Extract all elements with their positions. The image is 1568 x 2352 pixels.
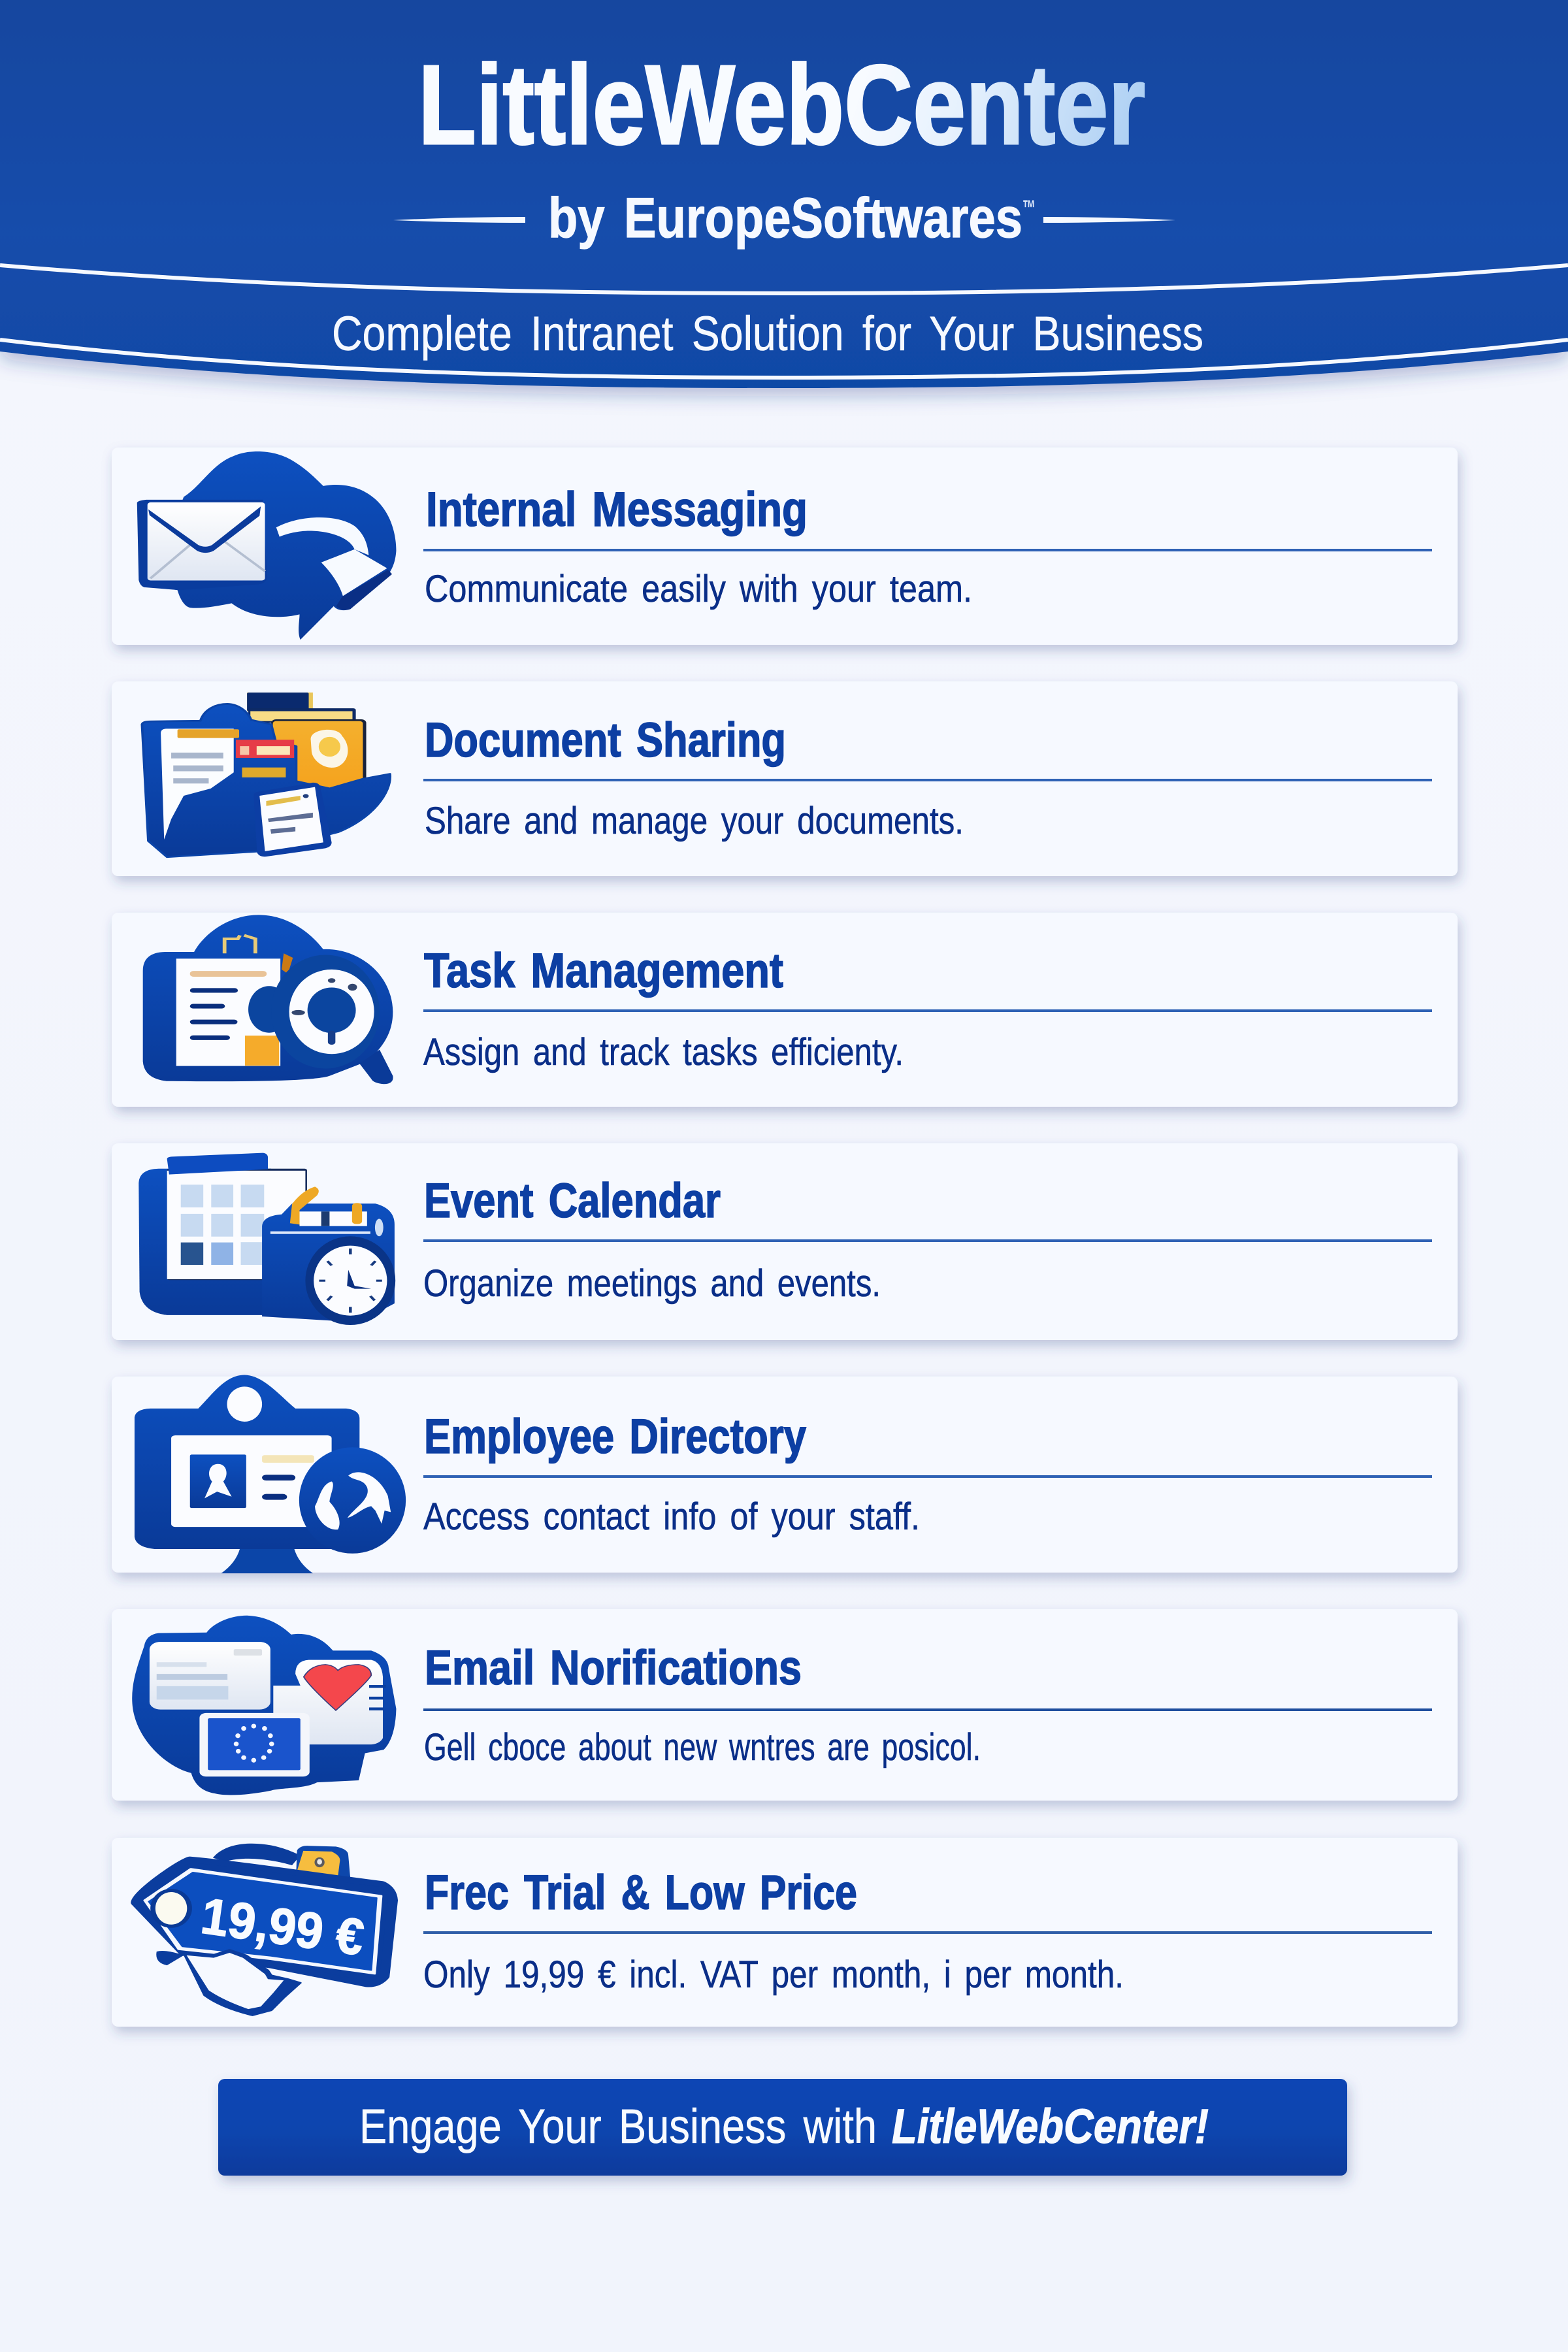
panel: Event Calendar <box>112 1143 1458 1340</box>
heading: Document Sharing <box>425 713 786 767</box>
icon: folders and documents <box>142 693 390 857</box>
icon: envelope with cloud and arrow <box>137 451 396 640</box>
card <box>112 1377 1458 1573</box>
price label: 19,99 € <box>198 1887 367 1967</box>
subtitle: ™ <box>1022 196 1036 221</box>
panel: Document Sharing <box>112 681 1458 876</box>
button shape <box>218 2079 1347 2176</box>
description: Assign and track tasks efficienty. <box>423 1031 904 1073</box>
card <box>112 1143 1458 1340</box>
tagline: Complete Intranet Solution for Your Business <box>332 306 1203 361</box>
title: LittleWebCenter <box>418 41 1145 168</box>
panel: Employee Directory <box>112 1375 1458 1573</box>
icon: calendar and clock <box>139 1153 395 1325</box>
description: Organize meetings and events. <box>423 1262 881 1305</box>
heading: Employee Directory <box>424 1409 806 1463</box>
heading: Task Management <box>424 943 783 998</box>
description: Gell cboce about new wntres are posicol. <box>424 1726 981 1769</box>
description: Only 19,99 € incl. VAT per month, i per month. <box>423 1953 1124 1996</box>
icon: email, heart and EU flag <box>132 1616 396 1795</box>
icon: price tag <box>136 1844 393 2016</box>
heading: Email Norifications <box>425 1641 802 1695</box>
button text: Engage Your Business with <box>359 2099 877 2153</box>
call to action button <box>218 2079 1347 2176</box>
banner curved lines <box>0 265 1568 378</box>
card <box>112 913 1458 1107</box>
card <box>112 1838 1458 2027</box>
panel: Free Trial and Low Price <box>112 1838 1458 2027</box>
header banner <box>0 0 1568 388</box>
description: Communicate easily with your team. <box>425 568 972 610</box>
panel: Internal Messaging <box>112 448 1458 645</box>
icon: monitor with employee card <box>135 1375 406 1573</box>
heading: Event Calendar <box>424 1173 721 1228</box>
heading: Internal Messaging <box>426 482 808 536</box>
subtitle: by EuropeSoftwares <box>548 187 1022 250</box>
description: Access contact info of your staff. <box>423 1495 920 1538</box>
banner shape <box>0 0 1568 388</box>
card <box>112 1609 1458 1801</box>
card <box>112 681 1458 876</box>
icon: clipboard and magnifier <box>143 915 393 1084</box>
panel: Task Management <box>112 913 1458 1107</box>
description: Share and manage your documents. <box>425 800 964 842</box>
panel: Email Notifications <box>112 1609 1458 1801</box>
heading: Frec Trial & Low Price <box>425 1865 857 1919</box>
card <box>112 448 1458 645</box>
button text: LitleWebCenter! <box>892 2099 1209 2153</box>
